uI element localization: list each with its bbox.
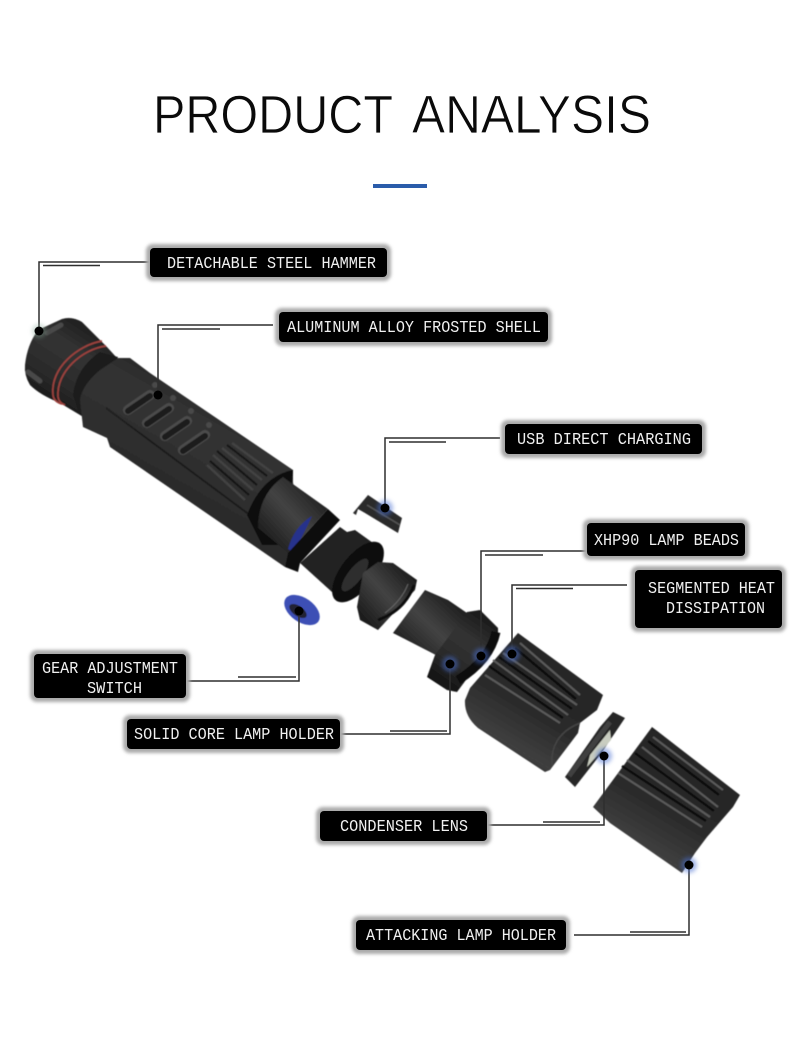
label: xhp90 lamp beads: XHP90 LAMP BEADS <box>594 532 739 551</box>
condenser lens <box>565 712 625 787</box>
main body <box>80 358 300 567</box>
label: detachable steel hammer: DETACHABLE STEEL HAMMER <box>167 255 376 274</box>
label: aluminum alloy frosted shell <box>275 308 552 346</box>
label: condenser lens: CONDENSER LENS <box>340 818 468 837</box>
title accent bar <box>373 184 427 188</box>
leader lines <box>39 262 689 935</box>
gear switch <box>279 589 325 631</box>
label: segmented heat dissipation <box>631 566 786 632</box>
tail cap <box>25 318 117 418</box>
label: aluminum alloy frosted shell: ALUMINUM ALLOY FROSTED SHELL <box>287 319 541 338</box>
label: attacking lamp holder <box>352 916 570 954</box>
title <box>153 85 651 145</box>
battery module <box>300 527 394 611</box>
lamp holder <box>393 590 498 692</box>
label: gear adjustment switch: SWITCH <box>87 680 142 699</box>
front bezel <box>593 727 740 873</box>
USB cover <box>353 495 402 533</box>
label: gear adjustment switch: GEAR ADJUSTMENT <box>42 660 178 679</box>
label: attacking lamp holder: ATTACKING LAMP HOLDER <box>366 927 556 946</box>
label: segmented heat dissipation: DISSIPATION <box>666 600 765 619</box>
retaining ring <box>357 562 417 630</box>
label: usb direct charging <box>501 420 706 458</box>
label: detachable steel hammer <box>146 244 391 281</box>
barrel <box>247 470 340 572</box>
title: ANALYSIS <box>412 85 651 145</box>
callout dots <box>32 324 697 873</box>
flashlight exploded view <box>25 318 740 873</box>
label: gear adjustment switch <box>30 650 190 702</box>
label: solid core lamp holder: SOLID CORE LAMP HOLDER <box>134 726 334 745</box>
heat sink sleeve <box>465 633 603 772</box>
label: xhp90 lamp beads <box>583 519 749 560</box>
label: usb direct charging: USB DIRECT CHARGING <box>517 431 691 450</box>
label: solid core lamp holder <box>123 715 344 753</box>
label: segmented heat dissipation: SEGMENTED HEAT <box>648 580 775 599</box>
label: condenser lens <box>316 807 491 845</box>
title: PRODUCT <box>153 85 393 145</box>
collar <box>73 352 118 424</box>
